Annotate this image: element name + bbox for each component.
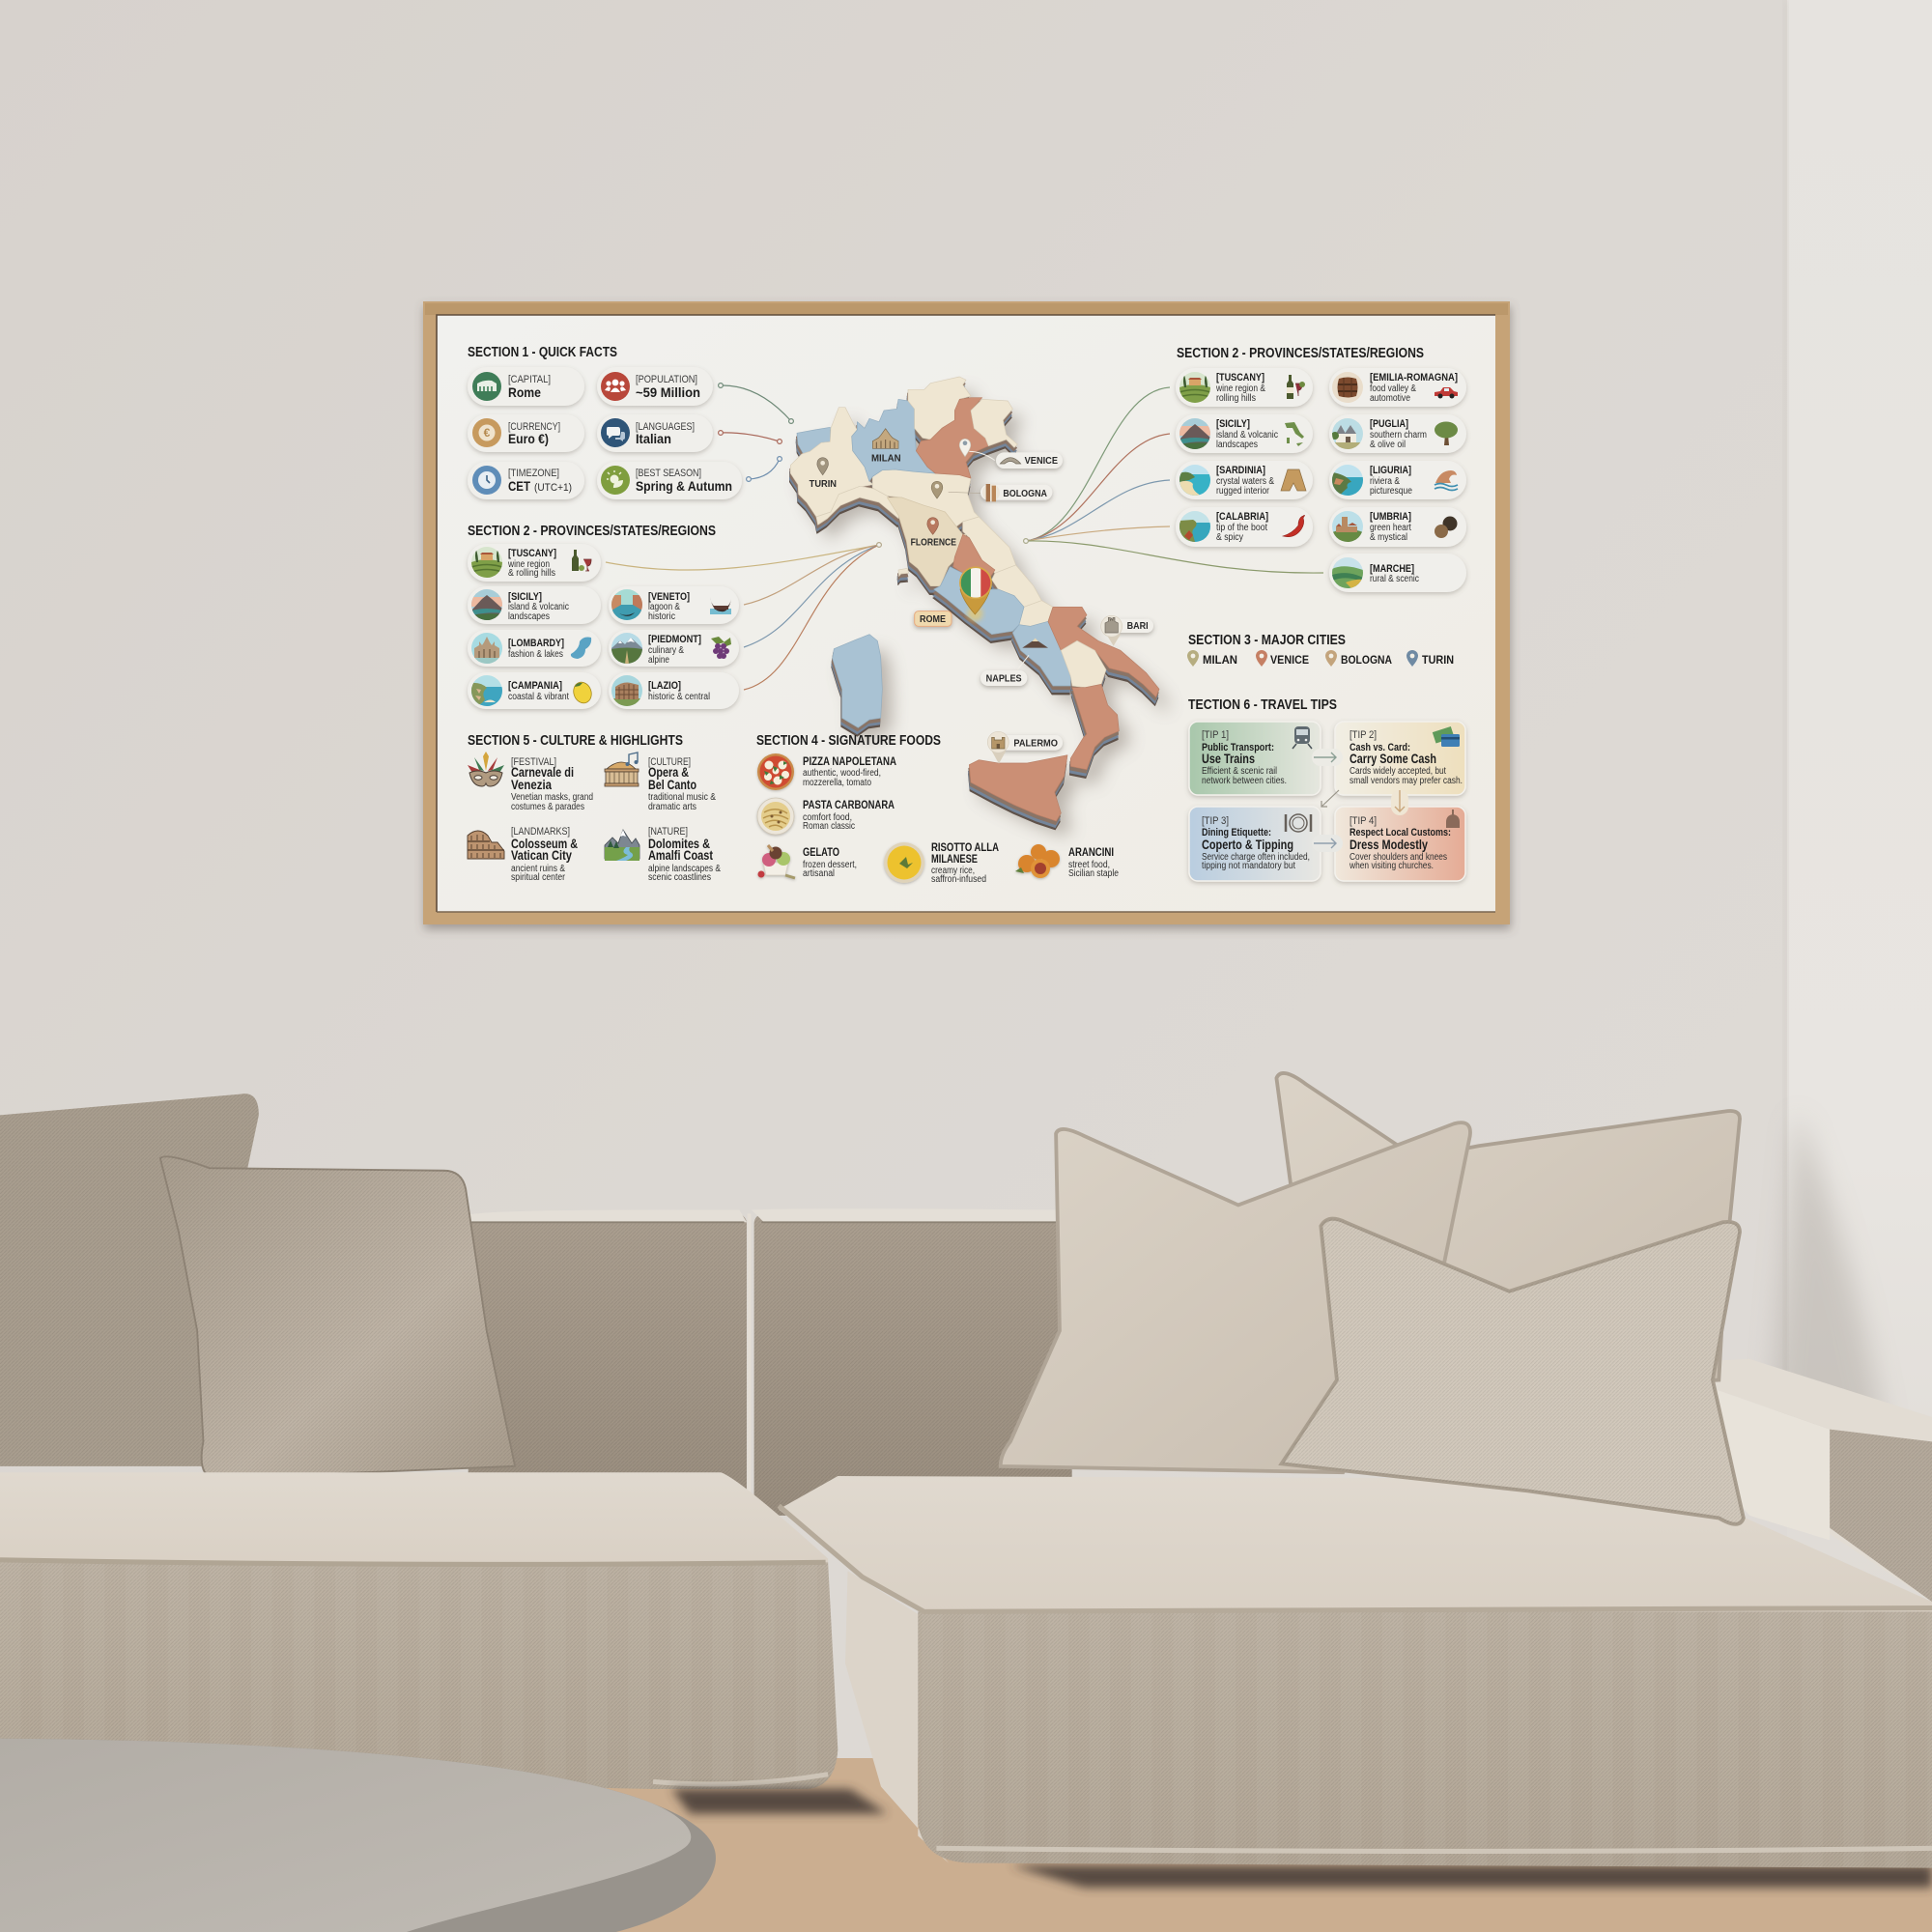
text: timezone xyxy=(508,468,572,494)
back right pillow xyxy=(1276,1073,1740,1392)
text: tuscany: rolling hills xyxy=(1216,393,1256,404)
text: tip 4: Respect Local Customs: xyxy=(1350,827,1451,838)
front right pillow xyxy=(1282,1219,1744,1524)
text: tip 3: Dining Etiquette: xyxy=(1202,827,1271,838)
panel: left tuscany xyxy=(468,544,601,582)
text: veneto xyxy=(648,591,690,622)
pin: Venice xyxy=(959,439,995,461)
text: currency: [CURRENCY] xyxy=(508,421,560,433)
text: nature: [NATURE] xyxy=(648,826,688,838)
icon: green hills xyxy=(1332,557,1363,588)
icon: olive tree xyxy=(1435,421,1458,445)
label: Turin: TURIN xyxy=(810,479,837,490)
text: liguria xyxy=(1370,465,1412,497)
text: tip 2: [TIP 2] xyxy=(1350,729,1377,741)
icon: chili xyxy=(1283,515,1304,537)
text: tip 4: when visiting churches. xyxy=(1349,861,1434,871)
icon: Vesuvius xyxy=(1017,639,1048,669)
icon: church xyxy=(1446,810,1460,828)
text: veneto: historic xyxy=(648,611,675,622)
text: pizza: mozzerella, tomato xyxy=(803,778,871,788)
item: pizza xyxy=(757,753,896,790)
text: landmarks: spiritual center xyxy=(511,872,566,883)
text: emilia-romagna xyxy=(1370,372,1458,404)
icon: carbonara xyxy=(757,798,794,835)
label: Rome: ROME xyxy=(920,614,946,625)
pin: Florence xyxy=(927,518,938,534)
text: lombardy xyxy=(508,638,564,660)
text: best season xyxy=(636,468,732,494)
left front pillow xyxy=(160,1156,515,1479)
text: tip 3: Coperto & Tipping xyxy=(1202,837,1293,852)
right sofa seat xyxy=(779,1476,1932,1868)
text: festival: costumes & parades xyxy=(511,802,584,812)
label: Bologna xyxy=(980,484,1052,501)
text: languages: [LANGUAGES] xyxy=(636,421,695,433)
text: tuscany: [TUSCANY] xyxy=(1216,372,1264,384)
text: tip 1: [TIP 1] xyxy=(1202,729,1229,741)
text: nature: Amalfi Coast xyxy=(648,847,713,863)
connector lines: left regions to hub xyxy=(606,543,881,690)
panel: quick fact capital xyxy=(468,367,584,406)
text: currency: Euro €) xyxy=(508,431,549,446)
text: arancini: ARANCINI xyxy=(1068,847,1114,859)
icon: opera house xyxy=(605,753,639,786)
text: tip 1 xyxy=(1202,729,1287,786)
text: tip 2: small vendors may prefer cash. xyxy=(1350,776,1463,786)
text: liguria: picturesque xyxy=(1370,486,1412,497)
text: sardinia: crystal waters & xyxy=(1216,476,1274,487)
text: festival: [FESTIVAL] xyxy=(511,756,556,768)
map soft shadow xyxy=(800,391,1169,836)
panel: quick fact timezone xyxy=(468,462,584,499)
framed poster xyxy=(423,301,1510,924)
label: Venice: VENICE xyxy=(1025,456,1058,467)
text: piedmont xyxy=(648,634,701,666)
heading: section 2 left: SECTION 2 - PROVINCES/STATES/REGIONS xyxy=(468,524,716,539)
panel: left campania xyxy=(468,672,601,709)
text: culture: [CULTURE] xyxy=(648,756,691,768)
pin: Venice xyxy=(1256,650,1267,667)
text: tip 1: Use Trains xyxy=(1202,751,1255,766)
text: currency xyxy=(508,421,560,446)
label: Rome xyxy=(915,611,952,626)
panel: tip 4 xyxy=(1335,807,1465,881)
panel: quick fact population xyxy=(597,367,713,406)
text: risotto xyxy=(931,842,999,885)
text: lombardy: fashion & lakes xyxy=(508,649,563,660)
sofa back cushions xyxy=(469,1208,1072,1516)
floor shadow under sofa xyxy=(671,1789,1932,1888)
item: nature xyxy=(605,826,721,883)
text: calabria: & spicy xyxy=(1216,532,1243,543)
text: capital: Rome xyxy=(508,384,541,400)
text: population: [POPULATION] xyxy=(636,374,697,385)
pin: Bologna xyxy=(1325,650,1337,667)
legend: major cities: VENICE xyxy=(1270,655,1309,667)
middle right pillow xyxy=(1001,1122,1470,1472)
text: culture: Opera & xyxy=(648,764,689,780)
text: languages xyxy=(636,421,695,446)
text: capital xyxy=(508,374,551,400)
panel: right emilia-romagna xyxy=(1329,368,1466,407)
text: sicily xyxy=(1216,418,1278,450)
legend: major cities: BOLOGNA xyxy=(1341,655,1392,667)
connector lines: right hub to regions xyxy=(1024,387,1323,573)
text: puglia xyxy=(1370,418,1427,450)
icon: hill town xyxy=(1332,511,1363,542)
icon: red car xyxy=(1435,387,1458,398)
text: emilia-romagna: [EMILIA-ROMAGNA] xyxy=(1370,372,1458,384)
item: pasta xyxy=(757,798,895,835)
icon: mini Italy xyxy=(1285,422,1304,446)
icon: lemon xyxy=(571,680,594,705)
icon: truffles xyxy=(1435,516,1457,538)
text: population: ~59 Million xyxy=(636,384,700,400)
pin: Turin xyxy=(817,458,828,475)
text: tip 4 xyxy=(1349,815,1451,871)
heading: section 2 right: SECTION 2 - PROVINCES/STATES/REGIONS xyxy=(1177,346,1424,361)
icon: volcano landscape xyxy=(1179,418,1210,449)
floor xyxy=(0,1758,1932,1932)
heading: section 3: SECTION 3 - MAJOR CITIES xyxy=(1188,633,1346,648)
text: marche: rural & scenic xyxy=(1370,574,1419,584)
icon: risotto xyxy=(884,842,924,883)
icon: barrel xyxy=(1332,372,1363,403)
arrow: tip 1 to tip 2 xyxy=(1312,749,1343,766)
heading: section 4: SECTION 4 - SIGNATURE FOODS xyxy=(756,733,941,749)
icon: volcano landscape xyxy=(471,589,502,620)
text: puglia: southern charm xyxy=(1370,430,1427,440)
text: lombardy: [LOMBARDY] xyxy=(508,638,564,649)
text: tip 1: Public Transport: xyxy=(1202,742,1274,753)
text: festival xyxy=(511,756,593,812)
text: pizza xyxy=(803,756,896,788)
text: tip 2: Cash vs. Card: xyxy=(1350,742,1410,753)
text: tuscany: & rolling hills xyxy=(508,568,555,579)
text: culture: traditional music & xyxy=(648,792,716,803)
text: languages: Italian xyxy=(636,431,671,446)
icon: cash and card xyxy=(1433,726,1460,747)
icon: colosseum xyxy=(468,831,504,859)
label: Palermo: PALERMO xyxy=(1013,738,1058,749)
icon: people xyxy=(601,372,630,401)
text: sicily xyxy=(508,591,569,622)
icon: beach xyxy=(1179,465,1210,496)
text: gelato: artisanal xyxy=(803,868,835,879)
text: arancini: Sicilian staple xyxy=(1068,868,1119,879)
text: lazio: [LAZIO] xyxy=(648,680,681,692)
text: tip 3: [TIP 3] xyxy=(1202,815,1229,827)
label: Bari xyxy=(1101,615,1153,646)
label: Naples: NAPLES xyxy=(986,673,1022,684)
text: emilia-romagna: automotive xyxy=(1370,393,1410,404)
left sofa seat xyxy=(0,1472,838,1789)
text: campania: [CAMPANIA] xyxy=(508,680,562,692)
text: best season: Spring & Autumn xyxy=(636,478,732,494)
text: piedmont: [PIEDMONT] xyxy=(648,634,701,645)
text: campania: coastal & vibrant xyxy=(508,692,569,702)
text: nature: scenic coastlines xyxy=(648,872,711,883)
text: risotto: RISOTTO ALLA xyxy=(931,842,999,854)
text: liguria: [LIGURIA] xyxy=(1370,465,1411,476)
sofa and pillows xyxy=(0,1073,1932,1932)
text: pizza: PIZZA NAPOLETANA xyxy=(803,756,896,768)
text: umbria: & mystical xyxy=(1370,532,1407,543)
text: culture xyxy=(648,756,716,812)
text: lazio: historic & central xyxy=(648,692,710,702)
icon: wine xyxy=(1287,375,1305,399)
label: Naples xyxy=(980,670,1027,686)
icon: tuscany landscape xyxy=(471,547,502,578)
icon: lake xyxy=(571,638,591,659)
text: culture: dramatic arts xyxy=(648,802,696,812)
item: gelato xyxy=(757,845,857,879)
text: best season: [BEST SEASON] xyxy=(636,468,701,479)
icon: speech bubbles xyxy=(601,418,630,447)
icon: nuraghe xyxy=(1281,469,1306,491)
heading: section 1 quick facts: SECTION 1 - QUICK FACTS xyxy=(468,345,617,360)
text: pasta: comfort food, xyxy=(803,812,852,823)
arrow: tip 3 to tip 4 xyxy=(1312,835,1343,852)
label: Venice xyxy=(996,452,1063,469)
text: capital: [CAPITAL] xyxy=(508,374,551,385)
text: arancini: street food, xyxy=(1068,860,1110,870)
panel: tip 1 xyxy=(1189,722,1321,795)
text: festival: Venezia xyxy=(511,777,552,792)
text: risotto: saffron-infused xyxy=(931,874,986,885)
icon: mountains and river xyxy=(605,830,639,861)
text: landmarks xyxy=(511,826,578,883)
icon: wave xyxy=(1435,470,1458,491)
text: sicily: [SICILY] xyxy=(1216,418,1250,430)
icon: plate and cutlery xyxy=(1286,814,1311,832)
text: festival: Venetian masks, grand xyxy=(511,792,593,803)
icon: sun and leaf xyxy=(601,466,630,495)
text: tip 3: tipping not mandatory but xyxy=(1202,861,1295,871)
panel: left veneto xyxy=(609,586,739,624)
panel: right umbria xyxy=(1329,507,1466,547)
icon: colosseum xyxy=(472,372,501,401)
label: Palermo xyxy=(987,731,1063,764)
map of Italy xyxy=(789,377,1169,836)
pin: Milan xyxy=(1187,650,1199,667)
icon: mountain vineyard xyxy=(611,633,642,664)
panel: quick fact best season xyxy=(597,462,742,499)
text: umbria: [UMBRIA] xyxy=(1370,511,1411,523)
icon: euro coin: € xyxy=(484,426,491,440)
item: festival xyxy=(468,752,593,812)
panel: right tuscany xyxy=(1176,368,1313,407)
text: calabria: [CALABRIA] xyxy=(1216,511,1268,523)
panel: quick fact currency xyxy=(468,414,584,452)
text: tip 2: Cards widely accepted, but xyxy=(1350,766,1446,777)
text: pasta: Roman classic xyxy=(803,821,855,832)
text: risotto: creamy rice, xyxy=(931,866,975,876)
panel: right calabria xyxy=(1176,507,1313,547)
panel: right sardinia xyxy=(1176,461,1313,499)
icon: coast xyxy=(471,675,502,706)
text: liguria: riviera & xyxy=(1370,476,1400,487)
icon: pizza xyxy=(757,753,794,790)
text: sicily: landscapes xyxy=(508,611,550,622)
text: landmarks: ancient ruins & xyxy=(511,864,565,874)
text: veneto: lagoon & xyxy=(648,602,680,612)
panel: right puglia xyxy=(1329,414,1466,453)
text: tip 2: Carry Some Cash xyxy=(1350,751,1436,766)
heading: section 6: TECTION 6 - TRAVEL TIPS xyxy=(1188,697,1337,713)
arrow: tip 2 to tip 4 xyxy=(1391,790,1408,815)
text: gelato: frozen dessert, xyxy=(803,860,857,870)
panel: quick fact languages xyxy=(597,414,713,452)
label: Bologna: BOLOGNA xyxy=(1003,489,1047,499)
connector lines: quick facts to map xyxy=(719,384,793,481)
text: landmarks: [LANDMARKS] xyxy=(511,826,570,838)
text: landmarks: Colosseum & xyxy=(511,836,578,851)
text: lazio xyxy=(648,680,710,702)
text: sicily: landscapes xyxy=(1216,440,1258,450)
text: tip 4: Cover shoulders and knees xyxy=(1350,852,1447,863)
text: tuscany xyxy=(1215,372,1265,404)
icon: trulli xyxy=(1331,418,1363,449)
panel: right liguria xyxy=(1329,461,1466,499)
text: tuscany xyxy=(507,548,556,579)
text: tip 1: Efficient & scenic rail xyxy=(1202,766,1277,777)
icon: gondola xyxy=(710,597,731,614)
heading: section 5: SECTION 5 - CULTURE & HIGHLIGHTS xyxy=(468,733,683,749)
item: culture xyxy=(605,753,716,812)
icon: tuscany landscape xyxy=(1179,372,1210,403)
text: marche xyxy=(1370,563,1419,584)
panel: left lombardy xyxy=(468,630,601,667)
text: nature: Dolomites & xyxy=(648,836,710,851)
wood frame xyxy=(423,301,1510,924)
text: nature xyxy=(648,826,721,883)
text: sicily: [SICILY] xyxy=(508,591,542,603)
stone table xyxy=(0,1739,716,1932)
text: sardinia: rugged interior xyxy=(1216,486,1270,497)
text: nature: alpine landscapes & xyxy=(648,864,721,874)
text: arancini xyxy=(1068,847,1119,879)
text: sardinia xyxy=(1216,465,1274,497)
pin: Turin xyxy=(1406,650,1418,667)
text: timezone: CET xyxy=(508,478,530,494)
label: Florence: FLORENCE xyxy=(911,537,956,548)
text: puglia: & olive oil xyxy=(1370,440,1406,450)
text: piedmont: culinary & xyxy=(648,645,684,656)
poster paper xyxy=(437,315,1495,912)
item: landmarks xyxy=(468,826,578,883)
icon: venice canal xyxy=(611,589,642,620)
panel: tip 2 xyxy=(1335,722,1465,795)
text: risotto: MILANESE xyxy=(931,854,978,866)
text: tip 4: Dress Modestly xyxy=(1350,837,1428,852)
text: umbria xyxy=(1370,511,1411,543)
pin: Rome flag marker xyxy=(959,566,992,621)
text: tuscany: wine region xyxy=(507,559,550,570)
icon: grapes xyxy=(711,637,731,659)
arrow: tip 2 to tip 3 xyxy=(1321,790,1339,807)
text: pizza: authentic, wood-fired, xyxy=(803,768,881,779)
label: Milan: MILAN xyxy=(871,453,901,464)
label: Bari: BARI xyxy=(1127,621,1149,632)
panel: left lazio xyxy=(609,672,739,709)
text: timezone: (UTC+1) xyxy=(534,482,572,494)
text: gelato xyxy=(803,847,857,879)
icon: carnival mask xyxy=(468,752,504,786)
text: landmarks: Vatican City xyxy=(511,847,572,863)
text: tuscany: [TUSCANY] xyxy=(508,548,556,559)
map region surfaces xyxy=(790,377,1159,821)
text: gelato: GELATO xyxy=(803,847,839,859)
sofa right arm xyxy=(1700,1359,1932,1602)
text: marche: [MARCHE] xyxy=(1370,563,1414,575)
text: tip 4: [TIP 4] xyxy=(1350,815,1377,827)
icon: colosseum landscape xyxy=(611,675,642,706)
text: tip 3 xyxy=(1202,815,1310,871)
icon: train xyxy=(1293,726,1312,749)
icon: riviera xyxy=(1332,465,1363,496)
text: pasta: PASTA CARBONARA xyxy=(803,800,895,811)
text: veneto: [VENETO] xyxy=(648,591,690,603)
icon: gelato cup xyxy=(757,845,795,878)
legend: major cities: TURIN xyxy=(1422,655,1454,667)
text: emilia-romagna: food valley & xyxy=(1370,384,1416,394)
panel: right sicily xyxy=(1176,414,1313,453)
icon: milan cathedral xyxy=(471,633,502,664)
icon: coast xyxy=(1179,511,1210,542)
panel: right marche xyxy=(1329,554,1466,592)
panel: left sicily xyxy=(468,586,601,624)
text: tip 1: network between cities. xyxy=(1202,776,1287,786)
icon: wine xyxy=(572,550,591,571)
panel: left piedmont xyxy=(609,630,739,667)
pin: Bologna xyxy=(931,481,982,498)
icon: clock xyxy=(472,466,501,495)
text: festival: Carnevale di xyxy=(511,764,574,780)
text: culture: Bel Canto xyxy=(648,777,696,792)
text: calabria xyxy=(1216,511,1268,543)
legend: major cities: MILAN xyxy=(1203,655,1237,667)
legend: major cities xyxy=(1187,650,1454,667)
text: sicily: island & volcanic xyxy=(508,602,569,612)
text: sicily: island & volcanic xyxy=(1216,430,1278,440)
text: piedmont: alpine xyxy=(648,655,669,666)
text: population xyxy=(636,374,700,400)
text: tuscany: wine region & xyxy=(1215,384,1265,394)
item: risotto xyxy=(884,842,999,885)
item: arancini xyxy=(1015,844,1119,879)
text: tip 3: Service charge often included, xyxy=(1202,852,1310,863)
text: pasta xyxy=(803,800,895,832)
text: timezone: [TIMEZONE] xyxy=(508,468,559,479)
text: campania xyxy=(508,680,569,702)
left big pillow xyxy=(0,1094,259,1466)
text: umbria: green heart xyxy=(1370,523,1411,533)
icon: arancini xyxy=(1015,844,1060,878)
text: sardinia: [SARDINIA] xyxy=(1216,465,1265,476)
text: calabria: tip of the boot xyxy=(1216,523,1267,533)
panel: tip 3 xyxy=(1189,807,1321,881)
text: puglia: [PUGLIA] xyxy=(1370,418,1408,430)
map side layers xyxy=(789,381,1158,830)
text: tip 2 xyxy=(1350,729,1463,786)
icon: Milan cathedral xyxy=(872,429,898,448)
